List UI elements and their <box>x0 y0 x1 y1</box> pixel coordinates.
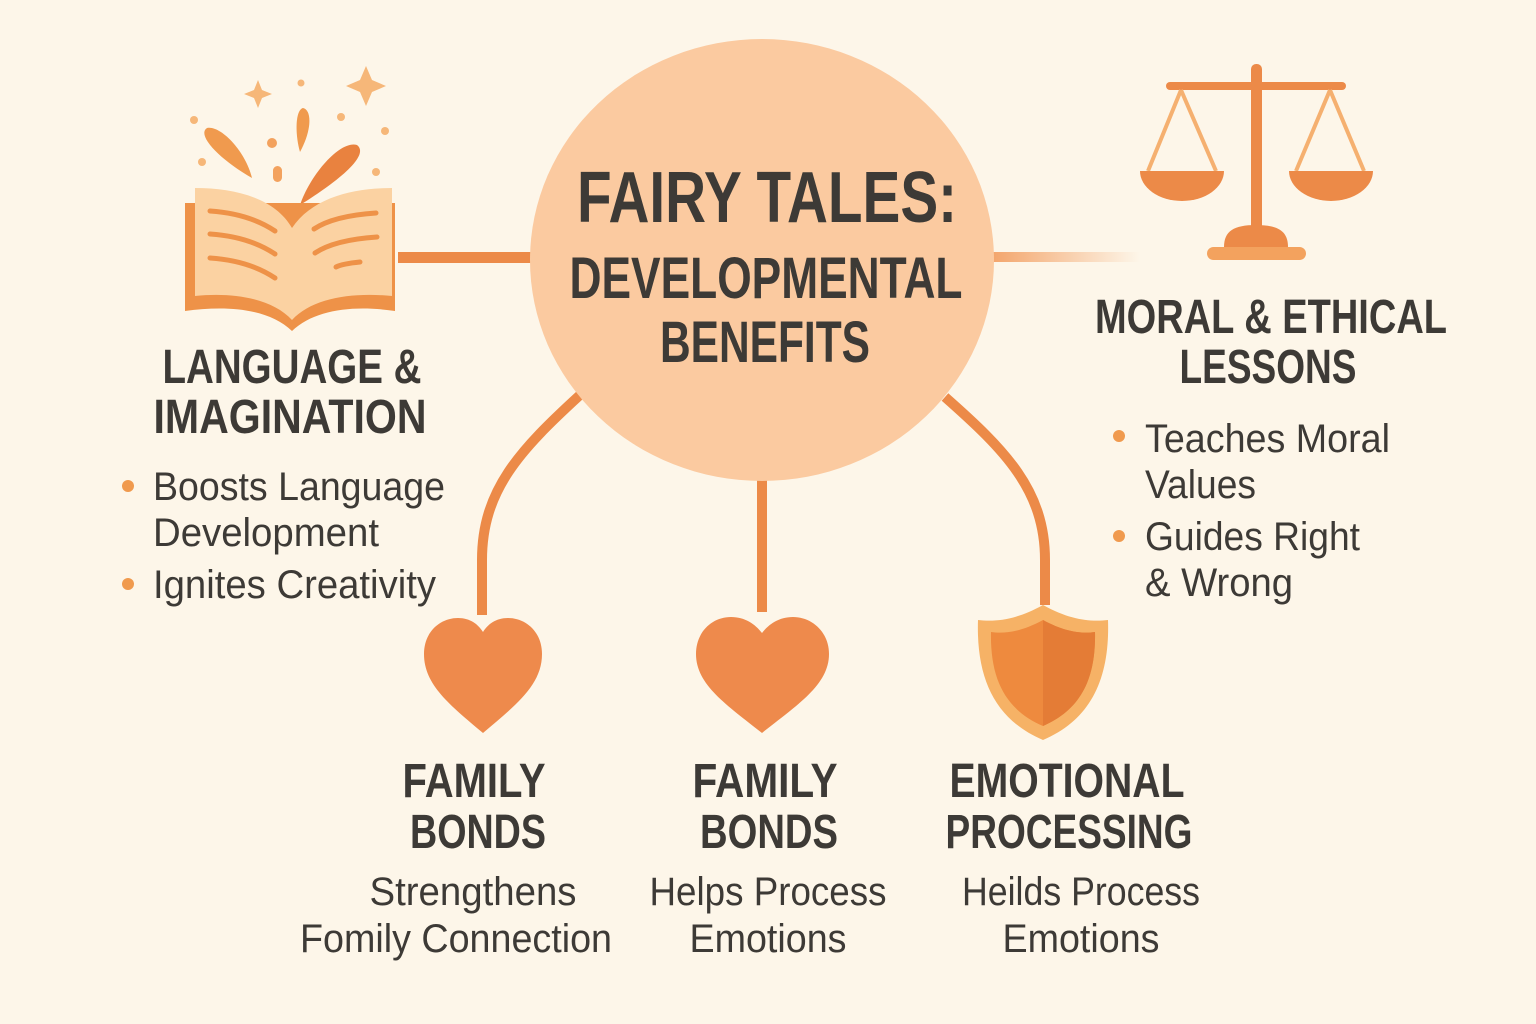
heading: moral & ethical: MORAL & ETHICAL <box>1095 291 1447 344</box>
bullets: moral: Guides Right <box>1145 515 1360 559</box>
column: family bonds 1: FAMILY <box>402 755 546 808</box>
column: emotional processing: EMOTIONAL <box>950 755 1184 808</box>
bullets: moral: & Wrong <box>1145 561 1293 605</box>
icon: open book with sparkles <box>185 66 395 331</box>
heading: moral & ethical: LESSONS <box>1180 341 1356 394</box>
heading: language & imagination: IMAGINATION <box>154 391 426 444</box>
heading: language & imagination: LANGUAGE & <box>162 341 422 394</box>
column: family bonds 2: Emotions <box>690 917 846 961</box>
heading: moral & ethical <box>1095 291 1447 394</box>
bullets: moral <box>1113 417 1390 605</box>
icon: shield <box>978 605 1108 740</box>
column: family bonds 1: Fomily Connection <box>300 917 612 961</box>
column: family bonds 1: BONDS <box>410 806 546 859</box>
connector: center to left heart <box>482 395 580 615</box>
connector: center to shield <box>945 397 1045 605</box>
column: emotional processing: Emotions <box>1002 917 1160 961</box>
bullets: moral: Values <box>1145 463 1256 507</box>
column: family bonds 2: Helps Process <box>650 870 886 914</box>
bullets: moral: Teaches Moral <box>1145 417 1390 461</box>
bullets: language: Development <box>153 511 379 555</box>
bullets: language <box>122 465 445 607</box>
column: family bonds 1: Strengthens <box>370 870 576 914</box>
connector: center to scale <box>990 252 1140 262</box>
heading: language & imagination <box>154 341 426 444</box>
column: emotional processing <box>946 755 1200 961</box>
icon: heart left <box>424 618 542 733</box>
column: family bonds 2 <box>650 755 886 961</box>
column: emotional processing: Heilds Process <box>962 870 1200 914</box>
column: family bonds 1 <box>300 755 612 961</box>
column: family bonds 2: FAMILY <box>692 755 838 808</box>
center circle with title: FAIRY TALES: <box>577 158 957 238</box>
icon: balance scale <box>1140 64 1373 260</box>
connector: center to middle heart <box>757 478 767 612</box>
column: family bonds 2: BONDS <box>700 806 838 859</box>
column: emotional processing: PROCESSING <box>946 806 1192 859</box>
icon: heart middle <box>696 617 829 733</box>
bullets: language: Ignites Creativity <box>153 563 436 607</box>
center circle with title: BENEFITS <box>660 310 870 375</box>
connector: book to center <box>398 252 533 263</box>
center circle with title: DEVELOPMENTAL <box>570 246 962 311</box>
bullets: language: Boosts Language <box>153 465 445 509</box>
center circle with title <box>530 39 994 481</box>
